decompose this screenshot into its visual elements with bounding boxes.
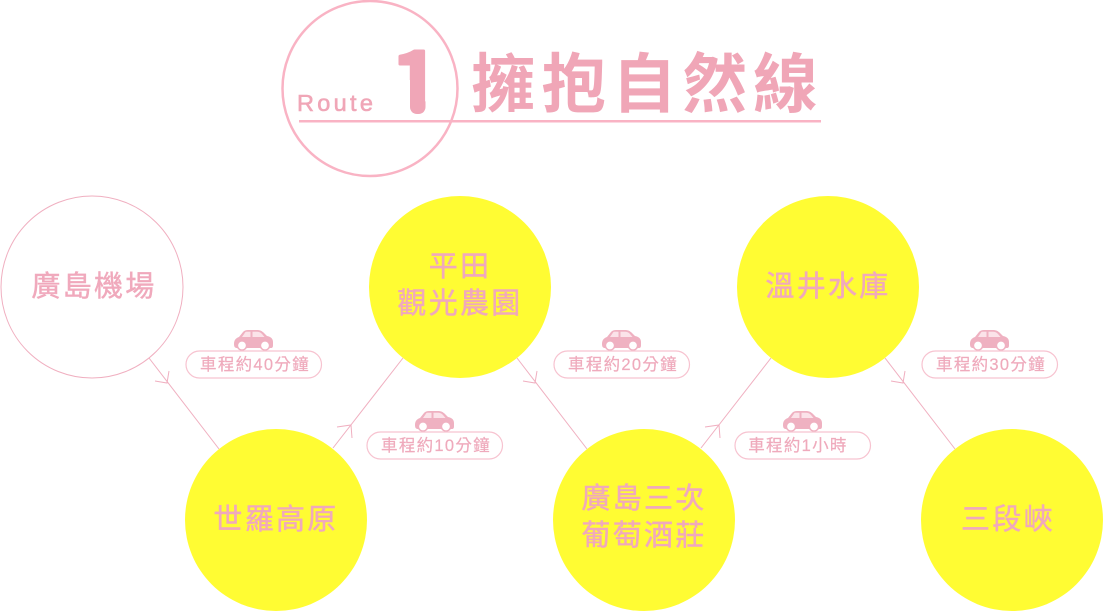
stop: Hiroshima Airport: [1, 196, 183, 378]
title underline: [299, 120, 821, 122]
header: route badge and title: [282, 1, 824, 176]
stop: Miyoshi winery: 葡萄酒莊: [581, 519, 707, 552]
drive time: 10 minutes: 車程約10分鐘: [381, 436, 491, 455]
drive time: 20 minutes: [554, 330, 690, 378]
arrow: Sera Kogen to Hirata: [333, 358, 403, 448]
arrow: Hirata to Miyoshi Winery: [517, 358, 587, 449]
route label: Route: [297, 90, 376, 116]
drive time: 40 minutes: [186, 330, 322, 378]
drive time: 40 minutes: 車程約40分鐘: [200, 355, 310, 374]
drive time: 1 hour: [735, 411, 870, 459]
stop: Hirata farm: 觀光農園: [397, 287, 523, 320]
route badge circle: [282, 1, 458, 176]
stop: Sera Kogen: 世羅高原: [213, 503, 339, 536]
arrow: Miyoshi Winery to Lake Ryujin: [701, 358, 771, 448]
title: 擁抱自然線: [471, 49, 824, 121]
drive time: 30 minutes: 車程約30分鐘: [936, 355, 1046, 374]
stop: Hiroshima Airport: 廣島機場: [31, 270, 157, 303]
arrow: Lake Ryujin to Sandankyo: [885, 358, 955, 449]
stop: Sandankyo: 三段峽: [961, 503, 1055, 536]
stop: Hirata farm: 平田: [429, 251, 491, 283]
stop: Onsui reservoir: 溫井水庫: [765, 270, 891, 303]
stop: Sandankyo: [921, 429, 1103, 611]
stop: Onsui reservoir: [737, 196, 919, 378]
drive time: 10 minutes: [367, 411, 502, 459]
stop: Miyoshi winery: [553, 429, 735, 611]
drive time: 30 minutes: [922, 330, 1058, 378]
arrow: airport to Sera Kogen: [149, 358, 219, 449]
stop: Miyoshi winery: 廣島三次: [581, 482, 707, 515]
stop: Sera Kogen: [185, 429, 367, 611]
stop: Hirata farm: [369, 196, 551, 378]
drive time: 20 minutes: 車程約20分鐘: [568, 355, 678, 374]
drive time: 1 hour: 車程約1小時: [748, 436, 848, 455]
route number: 1: [391, 17, 441, 138]
